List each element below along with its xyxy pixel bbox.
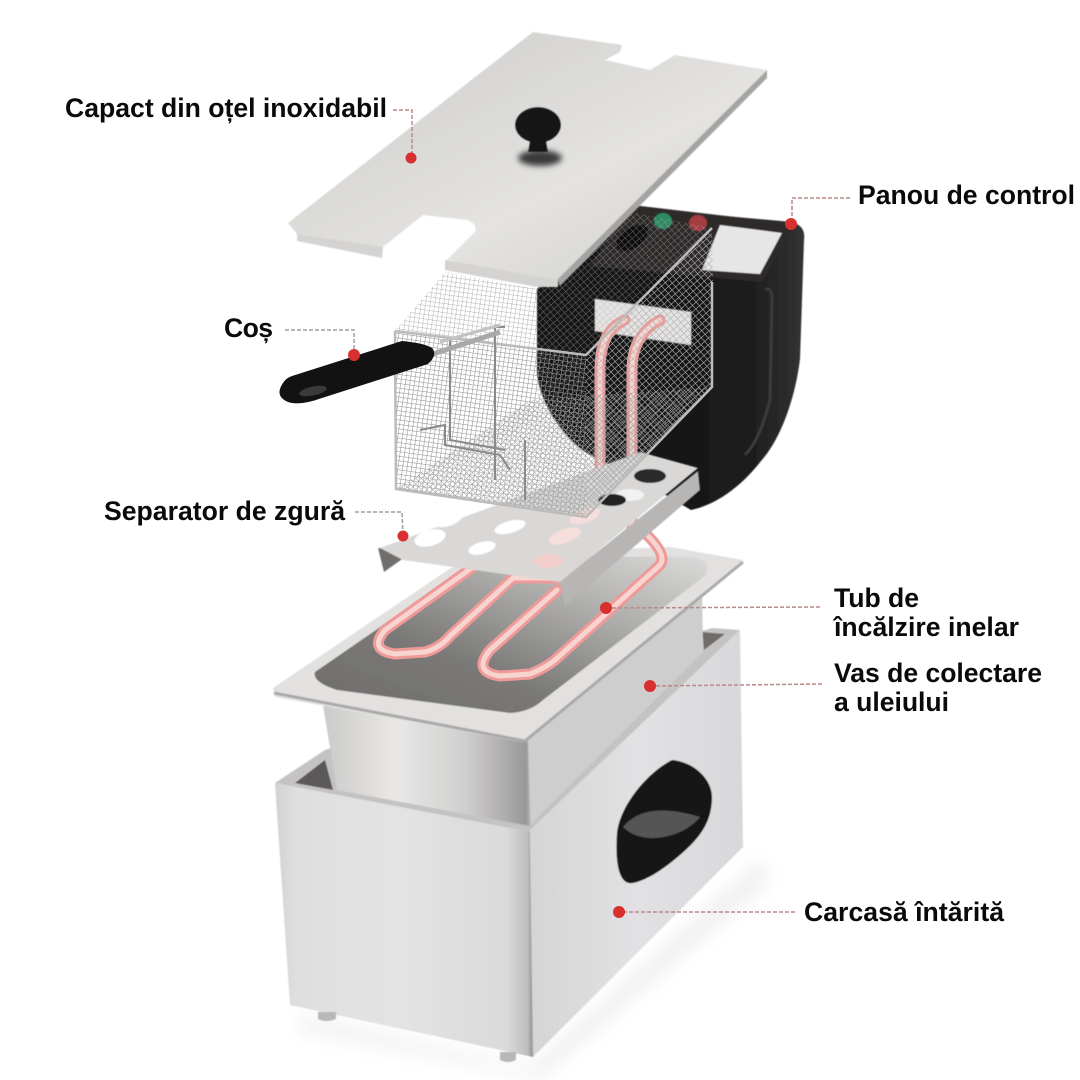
housing front face: [275, 783, 533, 1057]
tube highlight: [378, 320, 662, 676]
lid edge thickness: [297, 233, 558, 287]
label line 2: încălzire inelar: [832, 612, 1019, 642]
control panel body: [537, 205, 804, 510]
lid knob: [515, 107, 562, 166]
thermostat knob: [612, 219, 652, 257]
callout: stainless steel lid: [65, 93, 416, 164]
housing feet: [318, 1012, 516, 1062]
marker dot: [600, 602, 612, 614]
floor shadow: [300, 860, 770, 1078]
outer glow tube: [378, 320, 662, 676]
plate holes: [412, 469, 666, 568]
pan rim: [273, 547, 743, 742]
basket right wall: [586, 228, 713, 517]
housing right face: [530, 630, 743, 1057]
frying basket: [279, 210, 713, 517]
marker dot: [398, 530, 408, 542]
pan front body: [323, 705, 530, 826]
pan right body: [528, 580, 703, 824]
callout: basket: [224, 313, 360, 361]
leader line: [792, 198, 850, 224]
leader line: [285, 330, 354, 355]
basket near wall: [395, 331, 586, 517]
label: Coș: [224, 313, 273, 343]
callout: reinforced housing: [613, 897, 1004, 927]
stainless steel lid: [288, 32, 767, 287]
panel top: [590, 205, 795, 282]
label: Separator de zgură: [104, 496, 345, 526]
label line 2: a uleiului: [834, 687, 949, 717]
leader line: [393, 110, 412, 158]
white bracket plate: [595, 299, 691, 345]
callout: heating tube: [600, 583, 1019, 642]
leader line: [650, 684, 822, 686]
marker dot: [785, 218, 797, 230]
left flange: [378, 548, 412, 572]
marker dot: [406, 152, 416, 164]
basket back wall over panel: [537, 210, 712, 400]
oil collection pan: [273, 547, 743, 826]
green switch: [654, 213, 672, 229]
basket floor: [396, 387, 712, 517]
label: Capact din oțel inoxidabil: [65, 93, 387, 123]
front highlight: [745, 289, 772, 455]
lid surface: [288, 32, 767, 280]
outer housing: [275, 628, 743, 1062]
leader line: [619, 911, 795, 913]
housing side handle: [616, 760, 712, 883]
slag separator plate: [378, 452, 700, 606]
callout: oil pan: [644, 658, 1042, 717]
marker dot: [613, 906, 625, 918]
plate surface: [380, 452, 698, 582]
label line 1: Tub de: [834, 583, 919, 613]
basket rim and frame: [395, 228, 712, 517]
callout: slag separator: [104, 496, 408, 542]
basket inner hook wires: [420, 327, 525, 500]
black fryer head: [537, 207, 804, 510]
right flange: [560, 471, 700, 606]
heating ring tube: [378, 320, 662, 676]
housing inner dark gap: [295, 760, 333, 790]
label: Panou de control: [858, 180, 1075, 210]
handle wire: [430, 332, 500, 355]
label: Carcasă întărită: [804, 897, 1004, 927]
pan interior: [315, 556, 707, 713]
rating plate: [702, 225, 782, 274]
marker dot: [348, 349, 360, 361]
red switch: [689, 215, 707, 231]
housing back interior: [275, 628, 740, 832]
basket handle: [279, 341, 434, 403]
callout: control panel: [785, 180, 1075, 230]
marker dot: [644, 680, 656, 692]
label line 1: Vas de colectare: [834, 658, 1042, 688]
basket far wall: [395, 272, 537, 489]
leader line: [355, 512, 403, 536]
leader line: [606, 607, 820, 608]
